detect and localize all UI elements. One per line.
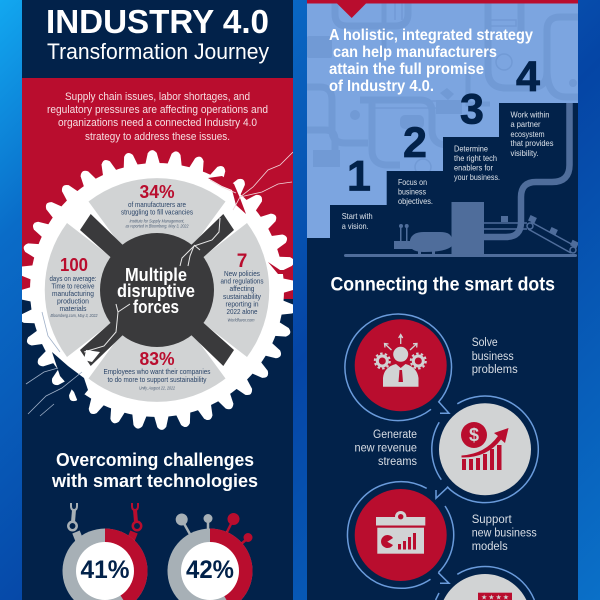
title: Transformation Journey — [47, 39, 269, 64]
heading: overcoming challenges: with smart technologies — [51, 470, 258, 491]
step numbers: 1 — [347, 152, 371, 200]
step 3 text: the right tech — [454, 153, 497, 163]
intro text — [47, 91, 268, 143]
strategy heading — [329, 27, 533, 95]
icon: revenue growth: $ — [469, 425, 479, 445]
hub cracks — [84, 218, 220, 352]
step 2 text: Focus on — [398, 177, 427, 187]
label: Support — [472, 514, 512, 526]
gear cracks: upper right — [208, 152, 293, 274]
ground line — [344, 254, 577, 257]
stat: 83%: Unily, August 22, 2022 — [139, 386, 176, 390]
stat: 83%: Employees who want their companies — [104, 367, 211, 376]
panel: right column — [307, 0, 579, 600]
donut: 41% with robot arms — [63, 503, 148, 600]
gear body and teeth — [12, 145, 302, 435]
step 2 text — [398, 177, 433, 206]
strategy heading: can help manufacturers — [333, 44, 497, 61]
ring and arrow — [432, 396, 538, 503]
stat: 7: sustainability — [223, 292, 261, 301]
stat: 100: Time to receive — [52, 282, 94, 290]
stat: 83%: to do more to support sustainability — [108, 375, 207, 384]
strategy heading: of Industry 4.0. — [329, 78, 434, 95]
strategy heading: attain the full promise — [329, 61, 484, 78]
stat: 83% — [104, 349, 211, 390]
label — [472, 337, 518, 376]
panel: navy lower band — [22, 299, 293, 600]
gear infographic — [12, 145, 302, 435]
step 2 text: business — [398, 187, 426, 197]
circle — [355, 319, 447, 411]
factory pipes backdrop — [307, 3, 578, 165]
stat: 7 — [220, 251, 264, 322]
step 1 text: Start with — [342, 211, 373, 221]
stat: 34%: as reported in Bloomberg, May 3, 2022 — [126, 224, 189, 228]
stat: 7: 7 — [237, 251, 247, 272]
label: Solve — [472, 337, 498, 349]
stat: 100: production — [57, 296, 89, 306]
hub label: forces — [133, 297, 179, 317]
circle — [444, 574, 526, 600]
step 4 text: a partner — [510, 119, 541, 129]
step 2 text: objectives. — [398, 196, 433, 206]
step 4 text: visibility. — [510, 148, 538, 158]
icon: revenue growth — [461, 422, 508, 470]
stat: 7: affecting — [230, 284, 254, 293]
stat: 100 — [50, 255, 98, 318]
stat: 34%: Institute for Supply Management, — [130, 218, 184, 224]
step 4 text: that provides — [510, 138, 554, 148]
stat: 100: Bloomberg.com, May 3, 2022 — [50, 313, 98, 318]
step 1 text — [342, 213, 372, 229]
stat: 100: manufacturing — [52, 289, 94, 298]
intro text: regulatory pressures are affecting operations and — [47, 104, 268, 116]
circle — [439, 403, 531, 495]
intro text: Supply chain issues, labor shortages, and — [65, 91, 250, 103]
tower — [452, 202, 484, 255]
title — [47, 10, 269, 64]
value: 42% — [186, 556, 234, 584]
step numbers — [349, 61, 540, 191]
step 3 text — [454, 144, 500, 182]
label: new business — [472, 528, 537, 540]
conveyor boxes — [501, 215, 579, 248]
heading: overcoming challenges: Overcoming challenges — [56, 449, 254, 470]
dot 1: solve business problems — [345, 314, 518, 421]
value: 41% — [80, 556, 130, 584]
stat: 7: Worldfavor.com — [228, 318, 255, 322]
label: problems — [472, 364, 518, 376]
step numbers: 3 — [460, 86, 484, 134]
heading: overcoming challenges — [51, 449, 258, 491]
stat: 7: New policies — [224, 269, 260, 278]
gear chips — [84, 350, 100, 362]
panel: title band — [22, 0, 293, 78]
step 4 text: ecosystem — [510, 129, 544, 139]
ring and arrow — [347, 482, 454, 588]
dark cross arms and hub — [80, 214, 234, 366]
donut ring — [63, 529, 148, 600]
step 3 text: enablers for — [454, 163, 493, 173]
factory machinery — [344, 103, 579, 257]
pipe — [484, 103, 570, 237]
intro text: organizations need a connected Industry 4.0 — [58, 117, 257, 129]
label: new revenue — [354, 443, 417, 455]
step 4 text: Work within — [510, 110, 550, 120]
label: models — [472, 541, 508, 553]
circle — [355, 489, 447, 581]
step 3 text: Determine — [454, 144, 488, 154]
label — [354, 429, 417, 468]
panel: red intro band — [22, 78, 293, 299]
ring — [436, 567, 534, 600]
tank — [410, 232, 452, 252]
label: Generate — [373, 429, 417, 441]
stat: 34%: struggling to fill vacancies — [121, 208, 193, 216]
stat: 100: 100 — [60, 255, 88, 275]
label — [472, 514, 537, 553]
strategy heading: A holistic, integrated strategy — [329, 27, 533, 44]
dot 3: support new business models — [347, 482, 537, 588]
machine base — [394, 224, 435, 255]
donut ring — [167, 529, 252, 600]
gray robot arm — [68, 503, 80, 542]
dot 2: generate new revenue streams — [354, 396, 538, 503]
step 4 text — [510, 110, 554, 158]
red top strip with pointer — [307, 0, 578, 18]
stat: 83%: 83% — [140, 349, 174, 369]
ring and arrow — [345, 314, 452, 421]
hub label — [118, 268, 194, 313]
stat: 7: reporting in — [226, 300, 258, 308]
hub label: Multiple — [125, 265, 187, 285]
step 1 text: a vision. — [342, 221, 369, 231]
label: business — [472, 351, 514, 363]
conveyor — [484, 222, 576, 253]
donut: 42% with nodes — [167, 514, 253, 600]
icon: person with gears — [375, 334, 426, 387]
stat: 34% — [121, 182, 193, 228]
gear cracks: lower left — [26, 312, 88, 416]
gray nodes — [176, 514, 212, 536]
icon: business board — [376, 511, 425, 554]
title: INDUSTRY 4.0 — [46, 3, 269, 40]
stat: 34%: of manufacturers are — [128, 200, 186, 209]
red robot arm — [130, 503, 141, 542]
stat: 7: 2022 alone — [226, 307, 258, 316]
intro text: strategy to address these issues. — [85, 131, 230, 143]
stat: 100: days on average: — [50, 274, 96, 283]
step 3 text: your business. — [454, 172, 500, 182]
panel: left column — [12, 0, 302, 600]
dot 4: partial circle — [436, 567, 534, 600]
hub label: disruptive — [117, 281, 195, 301]
stat: 34%: 34% — [140, 182, 174, 202]
panel: light blue strategy area — [307, 0, 578, 240]
gray sectors — [45, 178, 269, 402]
label: streams — [378, 456, 417, 468]
stat: 7: and regulations — [220, 276, 264, 286]
step numbers: 4 — [516, 53, 540, 101]
factory equipment backdrop — [307, 3, 577, 175]
stat: 100: materials — [60, 304, 87, 313]
step numbers: 2 — [403, 119, 427, 167]
navy staircase — [307, 103, 578, 600]
red nodes — [226, 514, 252, 545]
heading: connecting the smart dots: Connecting the smart dots — [330, 274, 555, 296]
